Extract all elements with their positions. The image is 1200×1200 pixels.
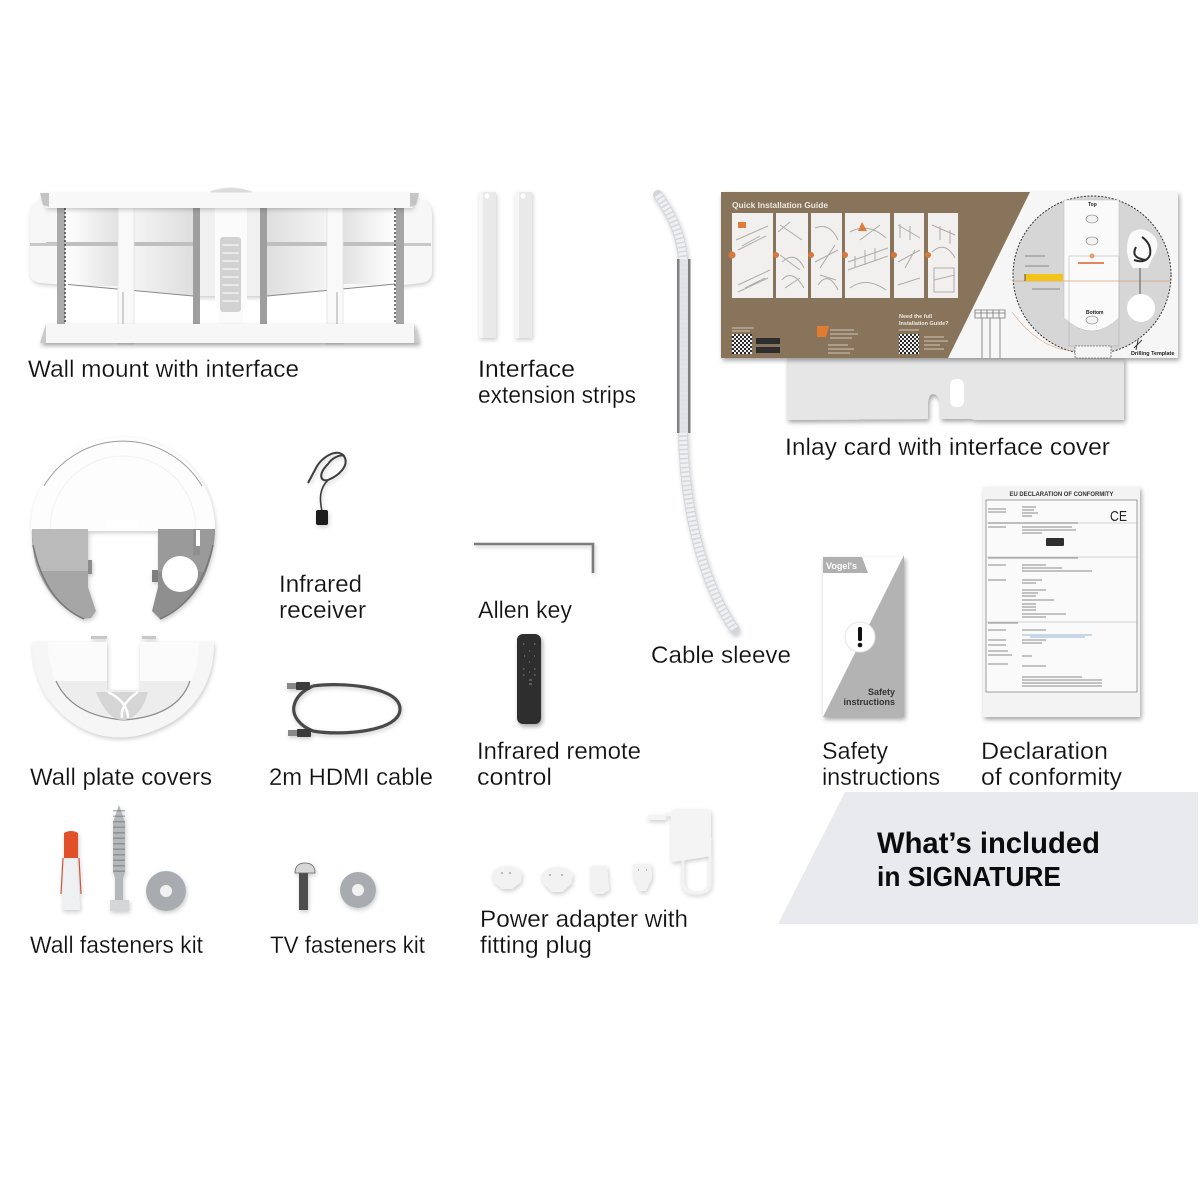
guide heading: Quick Installation Guide: [732, 201, 829, 210]
label: infrared receiver: receiver: [279, 597, 366, 624]
icon: safety instructions leaflet: [823, 555, 904, 717]
banner heading: in SIGNATURE: [877, 861, 1061, 892]
icon: safety instructions leaflet: Vogel's: [826, 561, 857, 571]
label: power adapter with fitting plug: Power adapter with: [480, 906, 688, 933]
brown guide side: [721, 192, 1030, 358]
label: inlay card with interface cover: Inlay card with interface cover: [785, 434, 1110, 461]
icon: power adapter with fitting plugs: [492, 809, 711, 894]
icon: interface cover: [787, 358, 1124, 420]
label: infrared remote control: Infrared remote: [477, 738, 641, 765]
banner heading: What’s included: [877, 827, 1100, 860]
full guide prompt: Installation Guide?: [899, 321, 949, 327]
wall anchor: [61, 831, 81, 910]
icon: allen key: [474, 544, 593, 573]
label: TV fasteners kit: TV fasteners kit: [270, 932, 425, 959]
label: allen key: Allen key: [478, 597, 572, 624]
icon: wall plate covers: [31, 437, 215, 737]
label: declaration of conformity: of conformity: [981, 764, 1122, 791]
fitting plugs: [492, 864, 652, 894]
bolt: [295, 863, 315, 910]
label: infrared receiver: Infrared: [279, 571, 362, 598]
panel: inlay card quick installation guide: [721, 192, 1178, 358]
icon: safety instructions leaflet: Safety: [868, 687, 895, 697]
washer: [146, 871, 186, 911]
label: wall fasteners kit: Wall fasteners kit: [30, 932, 203, 959]
adapter body and cable: [648, 809, 711, 893]
label: interface extension strips: Interface: [478, 356, 575, 383]
icon: declaration of conformity document: CE: [1110, 508, 1127, 525]
icon: HDMI cable: [287, 682, 400, 737]
icon: interface extension strips: [479, 192, 532, 338]
icon: safety instructions leaflet: instructions: [843, 697, 895, 707]
label: wall plate covers: Wall plate covers: [30, 764, 212, 791]
icon: declaration of conformity document: [983, 487, 1140, 717]
QR codes and store badges: [732, 326, 948, 354]
lower cover: [32, 636, 214, 737]
icon: declaration of conformity document: EU DECLARATION OF CONFORMITY: [1010, 491, 1114, 498]
full guide prompt: Need the full: [899, 314, 932, 320]
template labels: Drilling Template: [1131, 351, 1174, 357]
label: cable sleeve: Cable sleeve: [651, 642, 791, 669]
label: HDMI cable: 2m HDMI cable: [269, 764, 433, 791]
label: safety instructions: Safety: [822, 738, 888, 765]
icon: wall fasteners kit: [61, 805, 186, 911]
template labels: Top: [1088, 202, 1097, 208]
upper cover: [31, 437, 215, 619]
icon: infrared remote control: [517, 634, 541, 724]
drilling template details: [975, 200, 1171, 358]
banner: what's included: [778, 792, 1198, 924]
washer: [340, 872, 376, 908]
screw: [110, 805, 129, 911]
template labels: Bottom: [1086, 310, 1104, 316]
icon: TV fasteners kit: [295, 863, 376, 910]
drilling template circle: [1013, 196, 1171, 354]
icon: wall mount with interface: [30, 188, 432, 344]
icon: infrared receiver: [308, 453, 346, 525]
label: interface extension strips: extension strips: [478, 382, 636, 409]
installation step panels: [728, 213, 958, 298]
label: wall mount with interface: Wall mount with interface: [28, 356, 299, 383]
label: declaration of conformity: Declaration: [981, 738, 1108, 765]
label: infrared remote control: control: [477, 764, 552, 791]
label: safety instructions: instructions: [822, 764, 940, 791]
icon: cable sleeve: [658, 195, 735, 630]
label: power adapter with fitting plug: fitting plug: [480, 932, 592, 959]
